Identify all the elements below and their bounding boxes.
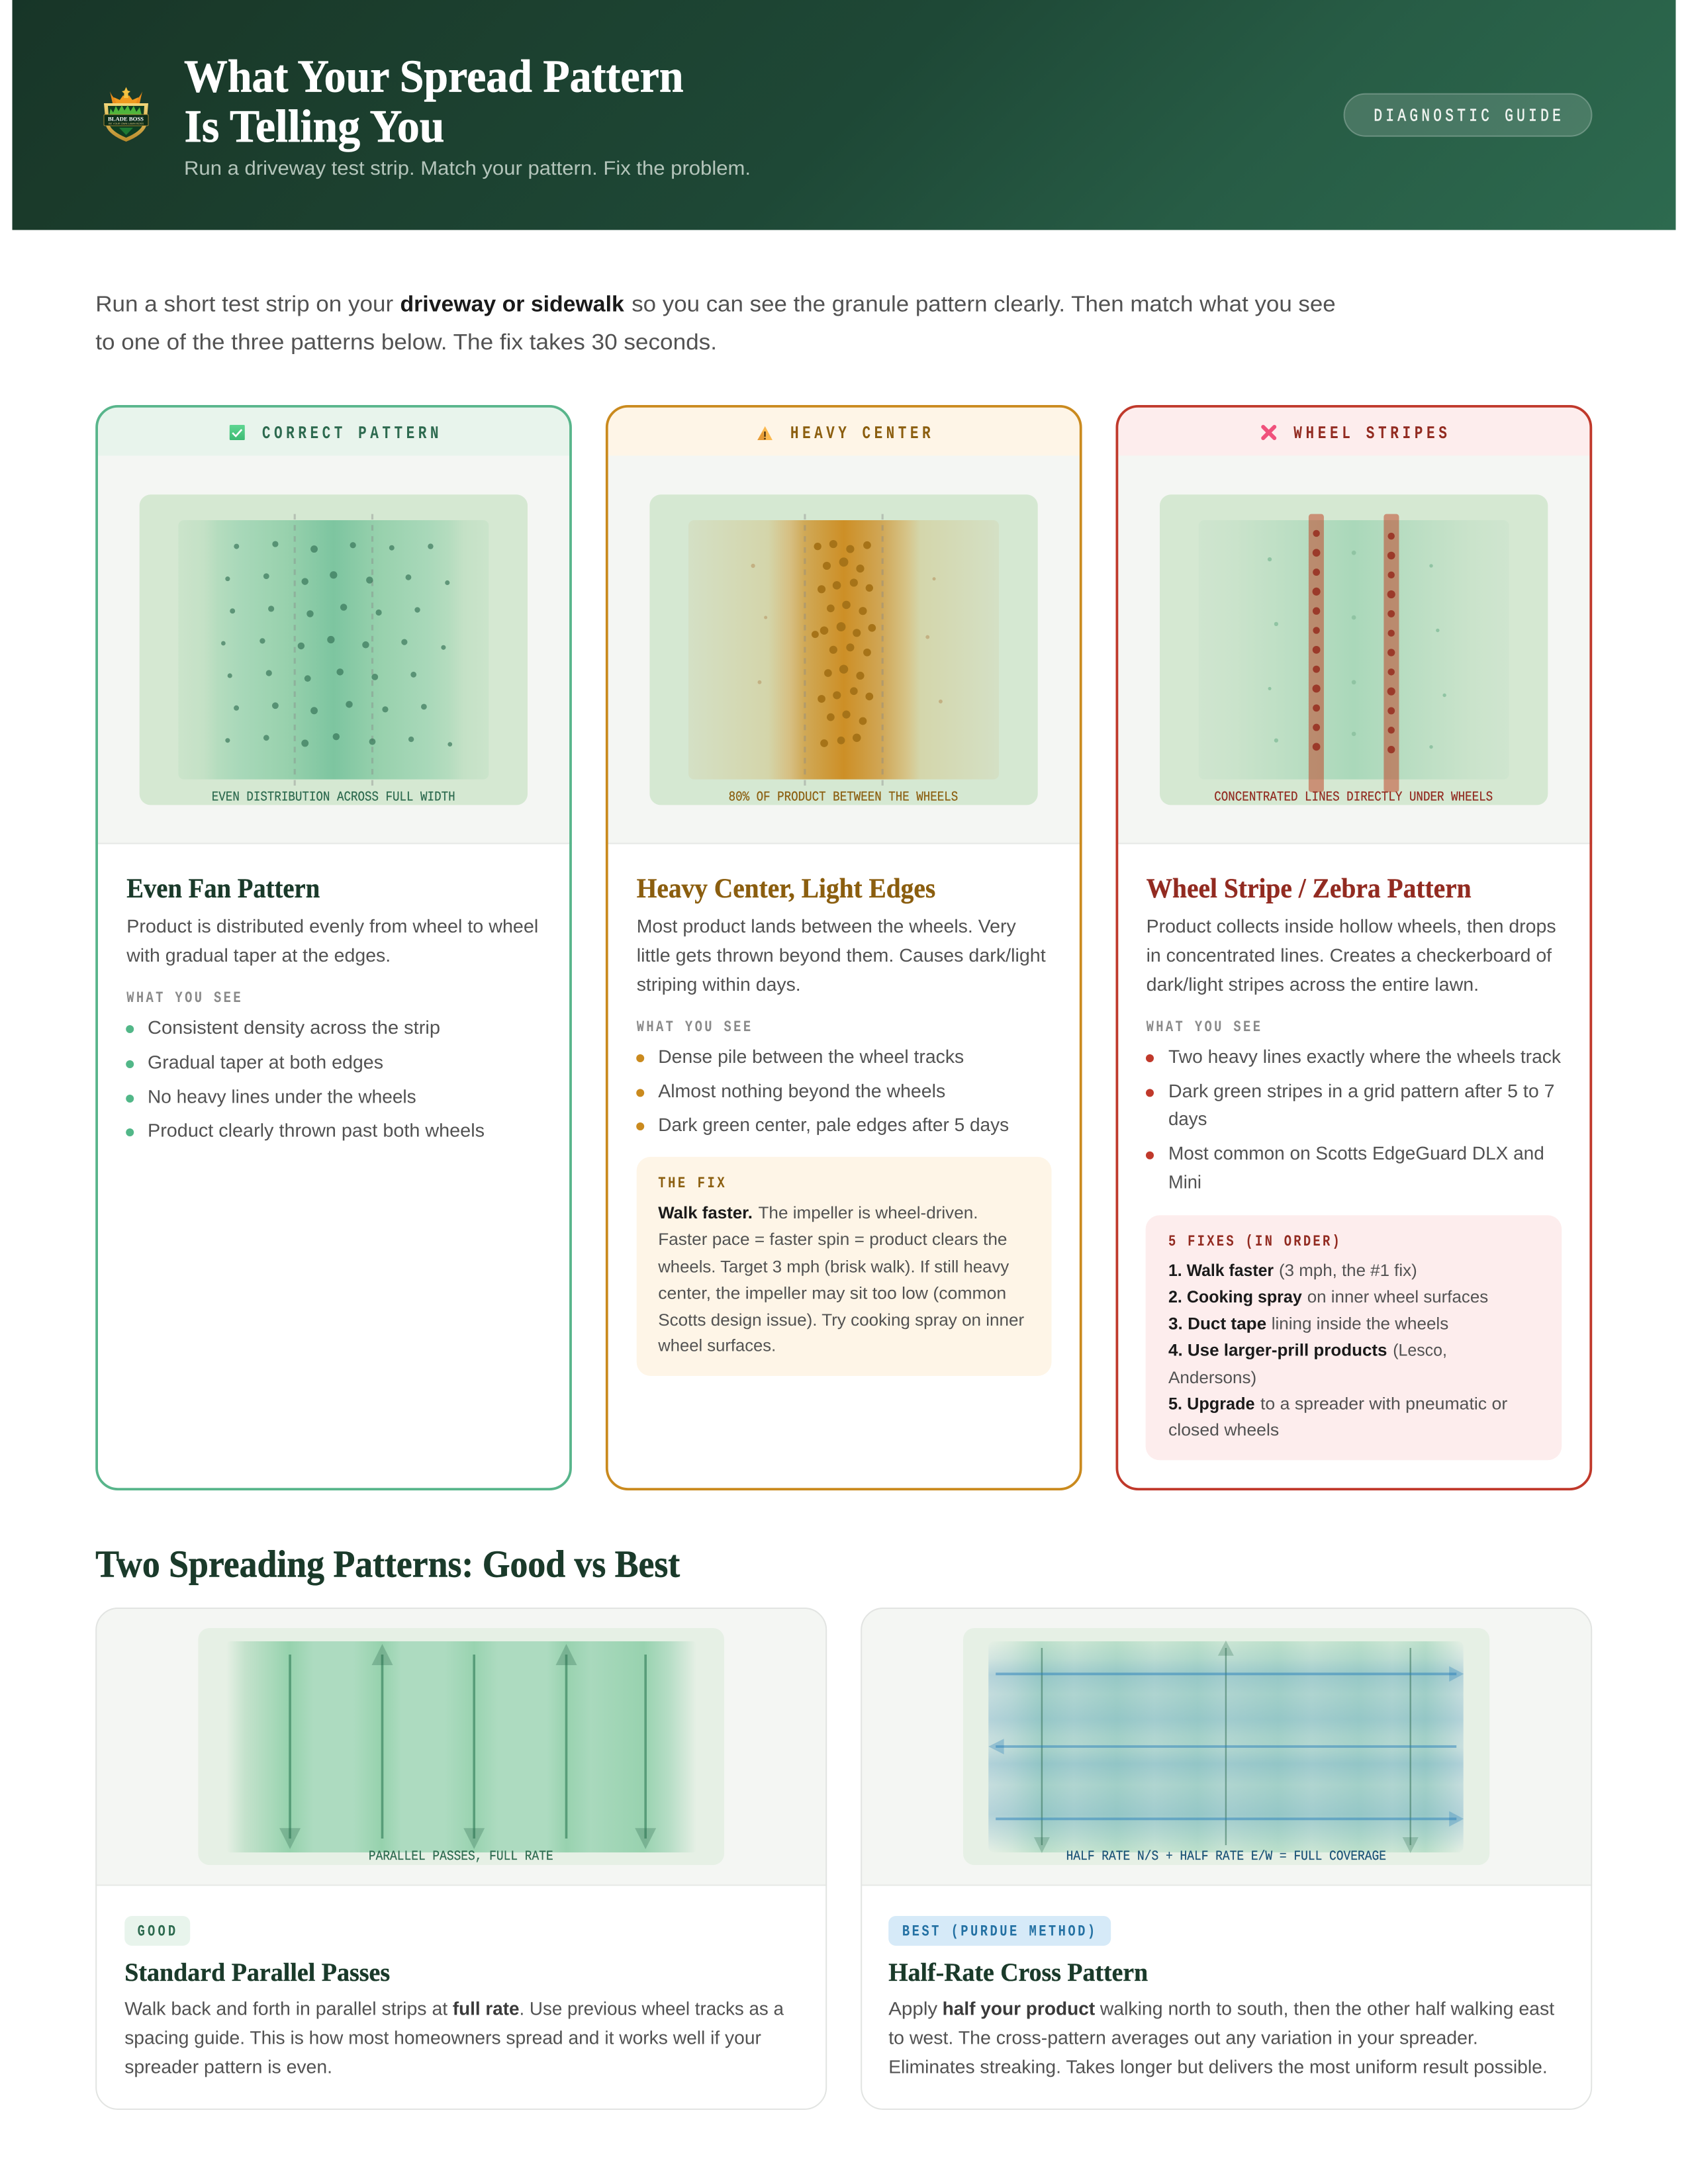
checklist: Product clearly thrown past both wheels	[148, 1120, 485, 1141]
heading: standard parallel passes: Standard Parallel Passes	[124, 1958, 390, 1987]
badge: diagnostic guide: DIAGNOSTIC GUIDE	[1374, 107, 1561, 126]
checklist: Dense pile between the wheel tracks	[658, 1046, 964, 1067]
description: Walk back and forth in parallel strips at	[124, 1999, 447, 2019]
callout: five fixes: lining inside the wheels	[1272, 1314, 1448, 1333]
badge: best	[888, 1916, 1111, 1946]
callout: five fixes: 1. Walk faster	[1168, 1261, 1274, 1280]
diagram: parallel passes	[198, 1628, 724, 1865]
description: Apply	[888, 1999, 937, 2019]
description: dark/light stripes across the entire lawn.	[1147, 974, 1479, 995]
intro paragraph: so you can see the granule pattern clearly. Then match what you see	[632, 293, 1336, 316]
icon: Blade Boss logo	[104, 87, 148, 142]
callout: five fixes: (Lesco,	[1393, 1342, 1447, 1360]
intro paragraph	[95, 293, 1336, 355]
description: spreader pattern is even.	[124, 2057, 332, 2077]
label: what you see: WHAT YOU SEE	[126, 989, 241, 1007]
diagram: heavy center: 80% OF PRODUCT BETWEEN THE WHEELS	[729, 790, 958, 805]
card label: correct pattern: CORRECT PATTERN	[262, 424, 439, 444]
description: Product collects inside hollow wheels, then drops	[1147, 916, 1556, 936]
callout: five fixes: (3 mph, the #1 fix)	[1279, 1261, 1417, 1280]
intro paragraph: driveway or sidewalk	[400, 293, 624, 316]
badge: best: BEST (PURDUE METHOD)	[902, 1923, 1095, 1940]
checklist: Gradual taper at both edges	[148, 1052, 383, 1072]
description	[637, 916, 1046, 995]
panel: half-rate cross pattern	[861, 1608, 1592, 2110]
checklist: Dark green center, pale edges after 5 days	[658, 1115, 1009, 1135]
callout: five fixes: on inner wheel surfaces	[1307, 1288, 1488, 1306]
diagram: wheel stripes	[1160, 494, 1548, 805]
callout: the fix: wheel surfaces.	[657, 1337, 776, 1355]
label: what you see: WHAT YOU SEE	[637, 1019, 751, 1036]
card label: heavy center: HEAVY CENTER	[790, 424, 931, 444]
callout: five fixes: Andersons)	[1168, 1369, 1256, 1387]
description: . Use previous wheel tracks as a	[519, 1999, 784, 2019]
checklist	[636, 1046, 1009, 1135]
callout: the fix: THE FIX	[658, 1175, 725, 1193]
description: with gradual taper at the edges.	[126, 945, 391, 966]
checklist: No heavy lines under the wheels	[148, 1087, 416, 1107]
description: full rate	[453, 1999, 519, 2019]
panel: correct pattern card	[95, 405, 572, 1490]
diagram: cross pattern: HALF RATE N/S + HALF RATE E/W = FULL COVERAGE	[1066, 1849, 1386, 1864]
callout: five fixes: to a spreader with pneumatic or	[1260, 1395, 1508, 1414]
callout: the fix: Faster pace = faster spin = product clears the	[658, 1230, 1008, 1249]
checklist: Most common on Scotts EdgeGuard DLX and	[1168, 1143, 1544, 1163]
panel: wheel stripes card	[1115, 405, 1593, 1490]
callout: five fixes: 2. Cooking spray	[1168, 1288, 1303, 1306]
heading: heavy center: Heavy Center, Light Edges	[637, 874, 935, 904]
icon: Blade Boss logo: BE YOUR OWN LAWN BOSS	[109, 122, 144, 125]
diagram: even fan pattern: EVEN DISTRIBUTION ACROSS FULL WIDTH	[212, 790, 455, 805]
title: Is Telling You	[184, 101, 445, 152]
description	[1147, 916, 1556, 995]
badge: diagnostic guide	[1344, 94, 1591, 136]
callout: the fix: center, the impeller may sit too low (common	[658, 1285, 1006, 1303]
title	[184, 51, 683, 152]
description: striping within days.	[637, 974, 801, 995]
intro paragraph: Run a short test strip on your	[95, 293, 393, 316]
diagram: even fan pattern	[140, 494, 528, 805]
callout: the fix	[637, 1157, 1051, 1376]
diagram: cross pattern	[963, 1628, 1489, 1865]
diagram: wheel stripes: CONCENTRATED LINES DIRECTLY UNDER WHEELS	[1214, 790, 1493, 805]
callout: five fixes	[1146, 1215, 1562, 1460]
checklist: days	[1168, 1109, 1207, 1129]
section heading: Two Spreading Patterns: Good vs Best	[95, 1543, 680, 1586]
callout: five fixes: 4. Use larger-prill products	[1168, 1342, 1387, 1360]
heading: even fan pattern: Even Fan Pattern	[126, 874, 320, 904]
description: spacing guide. This is how most homeowners spread and it works well if your	[124, 2028, 761, 2048]
checklist: Two heavy lines exactly where the wheels track	[1168, 1046, 1562, 1067]
checklist: Dark green stripes in a grid pattern after 5 to 7	[1168, 1081, 1555, 1101]
callout: the fix: wheels. Target 3 mph (brisk walk). If still heavy	[657, 1257, 1009, 1276]
callout: the fix: Scotts design issue). Try cooking spray on inner	[658, 1311, 1025, 1330]
callout: five fixes: 5. Upgrade	[1168, 1395, 1255, 1414]
description: little gets thrown beyond them. Causes dark/light	[637, 945, 1046, 966]
description	[126, 916, 538, 966]
description: in concentrated lines. Creates a checkerboard of	[1147, 945, 1552, 966]
description: Eliminates streaking. Takes longer but delivers the most uniform result possible.	[888, 2057, 1548, 2077]
description: walking north to south, then the other half walking east	[1100, 1999, 1554, 2019]
panel: standard parallel passes	[95, 1608, 827, 2110]
description	[888, 1999, 1554, 2077]
checklist: Almost nothing beyond the wheels	[658, 1081, 945, 1101]
title: What Your Spread Pattern	[184, 51, 683, 102]
description: to west. The cross-pattern averages out any variation in your spreader.	[888, 2028, 1478, 2048]
description: Most product lands between the wheels. Very	[637, 916, 1016, 936]
diagram: heavy center	[649, 494, 1038, 805]
callout: five fixes: 3. Duct tape	[1168, 1314, 1266, 1333]
badge: good: GOOD	[138, 1923, 175, 1940]
heading: wheel stripe: Wheel Stripe / Zebra Pattern	[1147, 874, 1472, 904]
heading: half-rate cross pattern: Half-Rate Cross Pattern	[888, 1958, 1148, 1987]
checklist: Mini	[1168, 1171, 1201, 1193]
callout: five fixes: closed wheels	[1168, 1421, 1279, 1439]
description	[124, 1999, 784, 2077]
icon: Blade Boss logo: BLADE BOSS	[108, 115, 144, 122]
checklist	[126, 1017, 485, 1141]
callout: the fix: Walk faster.	[658, 1204, 753, 1222]
description: half your product	[943, 1999, 1095, 2019]
badge: good	[124, 1916, 190, 1946]
callout: five fixes: 5 FIXES (IN ORDER)	[1168, 1233, 1340, 1251]
card label: wheel stripes: WHEEL STRIPES	[1293, 424, 1447, 444]
checklist	[1146, 1046, 1562, 1193]
panel: heavy center card	[605, 405, 1082, 1490]
header banner	[12, 0, 1676, 230]
intro paragraph: to one of the three patterns below. The fix takes 30 seconds.	[95, 330, 717, 355]
description: Product is distributed evenly from wheel to wheel	[126, 916, 538, 936]
checklist: Consistent density across the strip	[148, 1017, 440, 1038]
diagram: parallel passes: PARALLEL PASSES, FULL RATE	[369, 1849, 553, 1864]
subtitle: Run a driveway test strip. Match your pattern. Fix the problem.	[184, 158, 751, 179]
label: what you see: WHAT YOU SEE	[1147, 1019, 1260, 1036]
callout: the fix: The impeller is wheel-driven.	[759, 1204, 978, 1222]
